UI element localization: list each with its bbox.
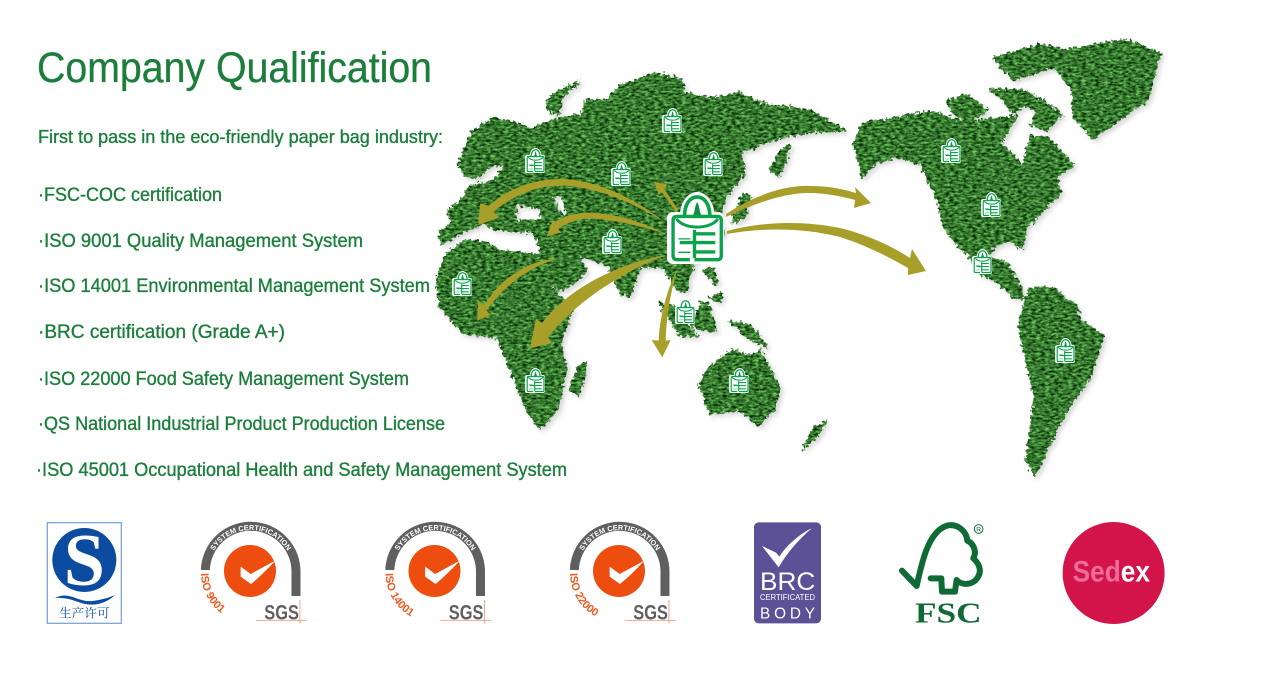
- arrow to Middle East: [547, 213, 665, 237]
- SGS ISO 9001 badge: ISO 9001: [201, 574, 224, 614]
- list item: FSC-COC: ·FSC-COC certification: [38, 185, 222, 206]
- arrow to Central America: [727, 223, 926, 275]
- SGS ISO 9001 badge: [200, 522, 307, 624]
- arrow to Central Asia: [654, 182, 678, 213]
- Sedex logo: Sedex: [1073, 556, 1151, 589]
- BRC certificated body badge: CERTIFICATED: [760, 592, 815, 602]
- arrow to West Africa: [477, 259, 557, 321]
- FSC logo: FSC: [915, 598, 982, 629]
- certification list: [36, 185, 567, 481]
- SGS ISO 9001 badge: SYSTEM CERTIFICATION: [210, 525, 292, 550]
- title: Company Qualification: [37, 44, 432, 92]
- FSC logo: R: [976, 527, 981, 534]
- SGS ISO 9001 badge: SGS: [264, 600, 299, 624]
- SGS ISO 22000 badge: [570, 522, 676, 624]
- central company logo: [667, 192, 724, 264]
- export arrows: [477, 179, 926, 357]
- BRC certificated body badge: BRC: [760, 568, 815, 596]
- arrow to Europe: [478, 179, 666, 225]
- list item: ISO 22000: ·ISO 22000 Food Safety Management System: [38, 369, 409, 390]
- BRC certificated body badge: [754, 522, 821, 623]
- arrow to East Africa: [530, 255, 665, 348]
- FSC logo: [902, 525, 983, 629]
- location markers: [452, 108, 1075, 393]
- intro line: First to pass in the eco-friendly paper bag industry:: [38, 127, 443, 147]
- list item: BRC: ·BRC certification (Grade A+): [38, 322, 285, 343]
- list item: ISO 45001: ·ISO 45001 Occupational Health and Safety Management System: [36, 460, 567, 481]
- QS production licence badge: [47, 520, 121, 623]
- Americas and Greenland: [853, 40, 1160, 475]
- arrow to North America: [726, 186, 871, 217]
- SGS ISO 14001 badge: ISO 14001: [386, 574, 414, 616]
- Eurasia and Africa: [437, 73, 845, 448]
- Sedex logo: [1063, 522, 1165, 624]
- SGS ISO 14001 badge: SYSTEM CERTIFICATION: [395, 525, 476, 550]
- QS production licence badge: S: [64, 520, 105, 602]
- SGS ISO 22000 badge: SGS: [633, 600, 668, 624]
- list item: QS: ·QS National Industrial Product Production License: [38, 414, 445, 435]
- SGS ISO 22000 badge: SYSTEM CERTIFICATION: [580, 525, 660, 550]
- list item: ISO 9001: ·ISO 9001 Quality Management System: [38, 231, 363, 252]
- SGS ISO 22000 badge: ISO 22000: [570, 574, 598, 616]
- QS production licence badge: 生产许可: [59, 603, 110, 622]
- arrow to Oceania: [652, 267, 678, 357]
- list item: ISO 14001: ·ISO 14001 Environmental Management System: [38, 276, 430, 297]
- SGS ISO 14001 badge: [385, 522, 492, 624]
- BRC certificated body badge: BODY: [760, 605, 815, 622]
- grass world map: [437, 40, 1160, 475]
- SGS ISO 14001 badge: SGS: [449, 600, 483, 624]
